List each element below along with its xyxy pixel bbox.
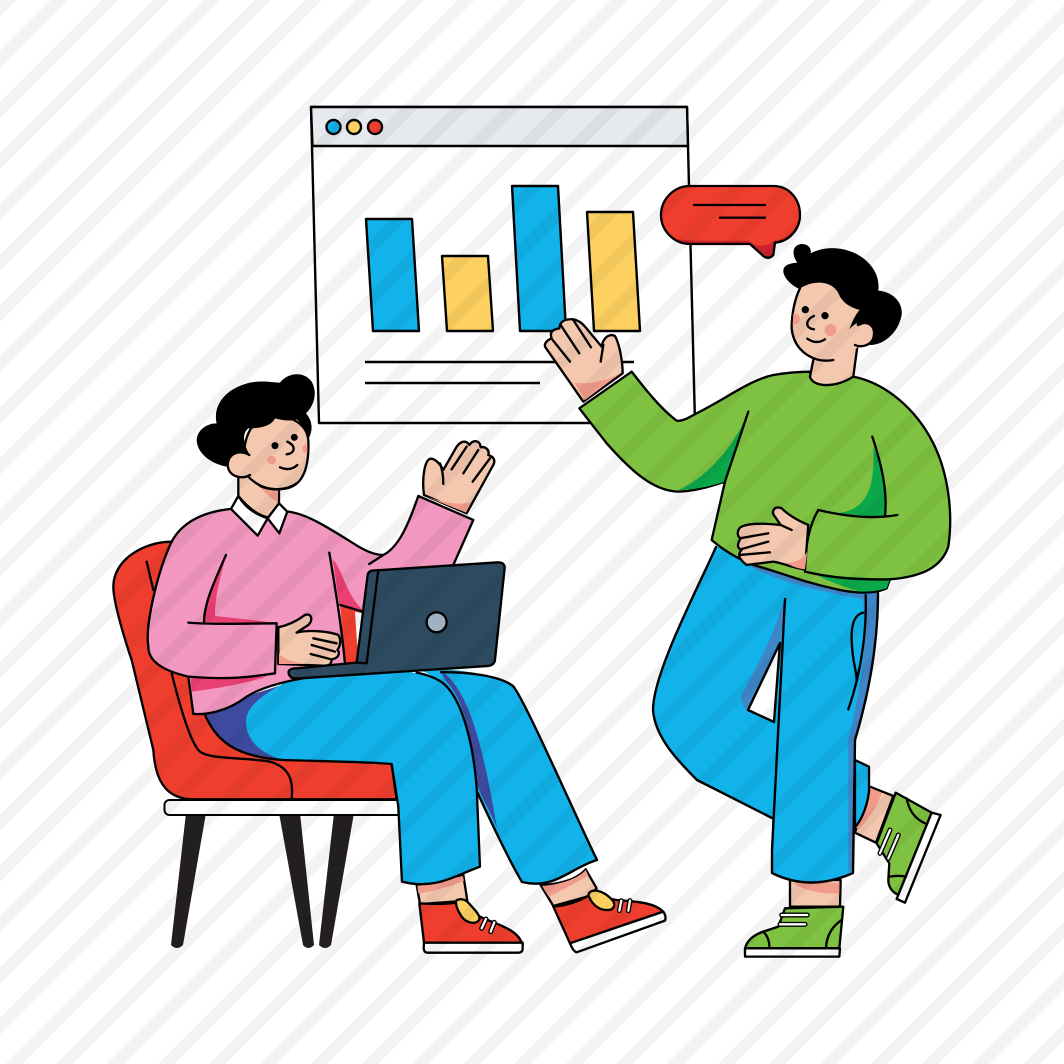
chair legs [171,813,354,948]
trouser outline [653,547,878,882]
near leg and hip [193,668,480,884]
green sweater [579,372,950,593]
laptop [289,562,505,678]
bar chart [366,186,640,331]
chair [113,542,404,948]
sweater body [148,496,473,714]
hand on belly [738,507,808,569]
hand on lap [278,615,340,666]
far foot with red shoe [541,869,666,952]
hair wedge beside ear [849,309,868,329]
chair seat and back [113,542,397,799]
pocket lines [848,595,866,709]
eyes [802,306,829,319]
neck [810,340,858,385]
front foot with green shoe [745,880,843,957]
window buttons [326,120,382,134]
pink sweater [148,496,473,714]
ear [852,323,874,346]
sweater fold lines [188,553,345,678]
chair base bar [164,800,404,815]
raised hand [545,319,623,402]
back foot with green shoe [855,760,941,903]
window title bar [311,107,688,146]
head and neck [783,244,902,385]
hair [783,244,902,345]
panel: browser window chart [311,107,695,423]
near foot with red shoe [417,875,523,953]
sweater shading [191,555,363,692]
cheeks [267,444,307,465]
eyes [271,434,298,449]
sweater shading [678,412,890,592]
text placeholder lines [365,362,634,383]
face [244,416,308,489]
leg gap [748,643,780,722]
speech bubble [661,186,800,258]
arm fold lines [725,412,897,579]
nose and mouth [280,442,297,469]
chair gap behind laptop [340,605,364,665]
blue trousers [653,545,878,882]
trouser shading [741,563,878,872]
neck [238,473,279,517]
person: seated man [148,374,666,953]
nose and mouth [807,316,825,342]
far leg [417,668,597,884]
raised hand [423,441,494,513]
collar [231,496,287,536]
ear [228,452,250,477]
hair [197,374,315,467]
person: standing man [545,244,950,957]
head and neck [197,374,315,536]
cheeks [793,313,837,336]
face [792,283,860,361]
